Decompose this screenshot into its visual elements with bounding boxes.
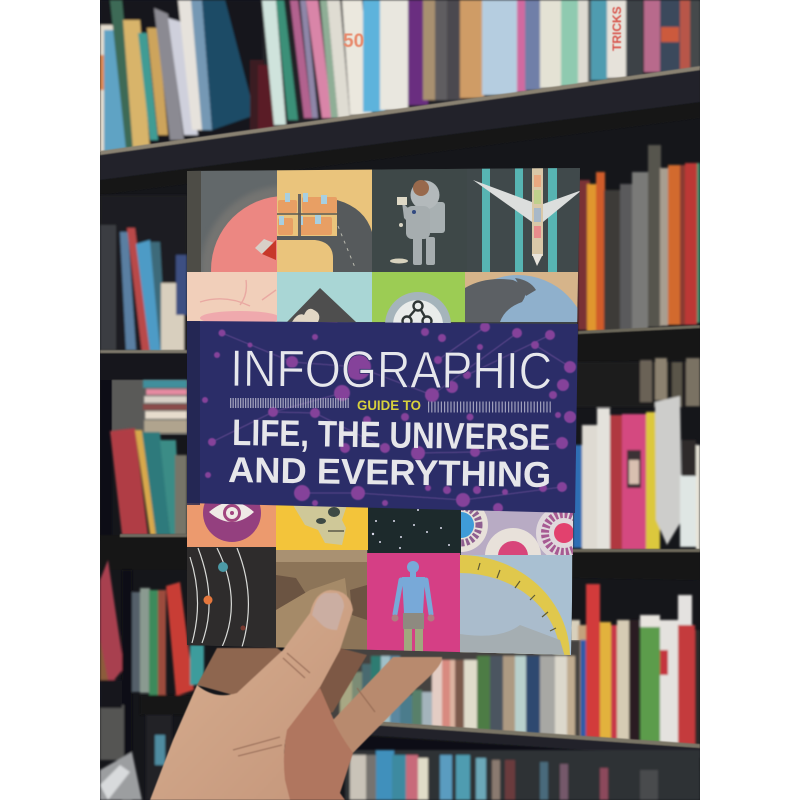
- bottom shelf board: [359, 721, 700, 750]
- tile: globe: [465, 272, 578, 322]
- subtitle: GUIDE TO: GUIDE TO: [357, 398, 421, 413]
- tile: protractor: [460, 555, 572, 657]
- tile: starfield: [368, 503, 461, 553]
- left shelf two: [100, 350, 187, 540]
- tile: aeroplane: [467, 168, 582, 272]
- tile: molecule: [372, 272, 465, 324]
- right shelf two: [578, 324, 700, 335]
- tile: sun: [187, 170, 352, 322]
- barcode strip left: [230, 398, 350, 408]
- tile: eye: [187, 503, 276, 547]
- tile: mountain: [277, 272, 372, 322]
- photo scene: book held up in front of bookshelves: [100, 0, 700, 800]
- book spine shading: [187, 321, 200, 505]
- barcode strip right: [428, 402, 552, 412]
- bookshelf background: [100, 0, 702, 800]
- title line: life, the universe: LIFE, THE UNIVERSE: [232, 412, 550, 458]
- top shelf board: [100, 66, 700, 180]
- tile: skull: [276, 503, 368, 550]
- shadowed web of the hand: [197, 648, 305, 697]
- left shelf three: [100, 534, 187, 539]
- book cover: [180, 165, 592, 660]
- title band: [187, 321, 578, 513]
- right middle books: [573, 358, 700, 550]
- spine lettering: [343, 6, 624, 52]
- top shelf books: [100, 0, 702, 160]
- purple dot network: [202, 322, 576, 513]
- tile: human body: [367, 553, 460, 655]
- right shelf three: [573, 548, 700, 553]
- title: INFOGRAPHIC: INFOGRAPHIC: [230, 340, 552, 401]
- lower right hand: [280, 688, 353, 800]
- middle finger behind thumb: [300, 648, 367, 725]
- tile: solar system: [187, 547, 276, 652]
- title line: and everything: AND EVERYTHING: [228, 449, 551, 495]
- thumb and palm: [150, 590, 353, 800]
- left lower books: [100, 560, 204, 800]
- index finger: [333, 657, 442, 753]
- tile: pink tissue: [187, 272, 280, 325]
- left middle books: [110, 380, 187, 535]
- spine lettering: TRICKS: [610, 6, 624, 51]
- spine lettering: 50: [343, 31, 364, 52]
- hand holding the book: [150, 590, 442, 800]
- bottom row books: [345, 750, 700, 800]
- tile: astronaut: [372, 168, 467, 272]
- right upper books: [578, 145, 700, 332]
- tile: road and cars: [277, 168, 372, 272]
- lower middle books: [330, 640, 582, 736]
- left upper books: [100, 195, 187, 355]
- right lower books: [570, 584, 700, 748]
- tile: brown anatomy: [276, 550, 367, 652]
- knuckle creases: [233, 653, 375, 756]
- tile: radial charts: [461, 510, 573, 555]
- thumbnail: [312, 593, 344, 630]
